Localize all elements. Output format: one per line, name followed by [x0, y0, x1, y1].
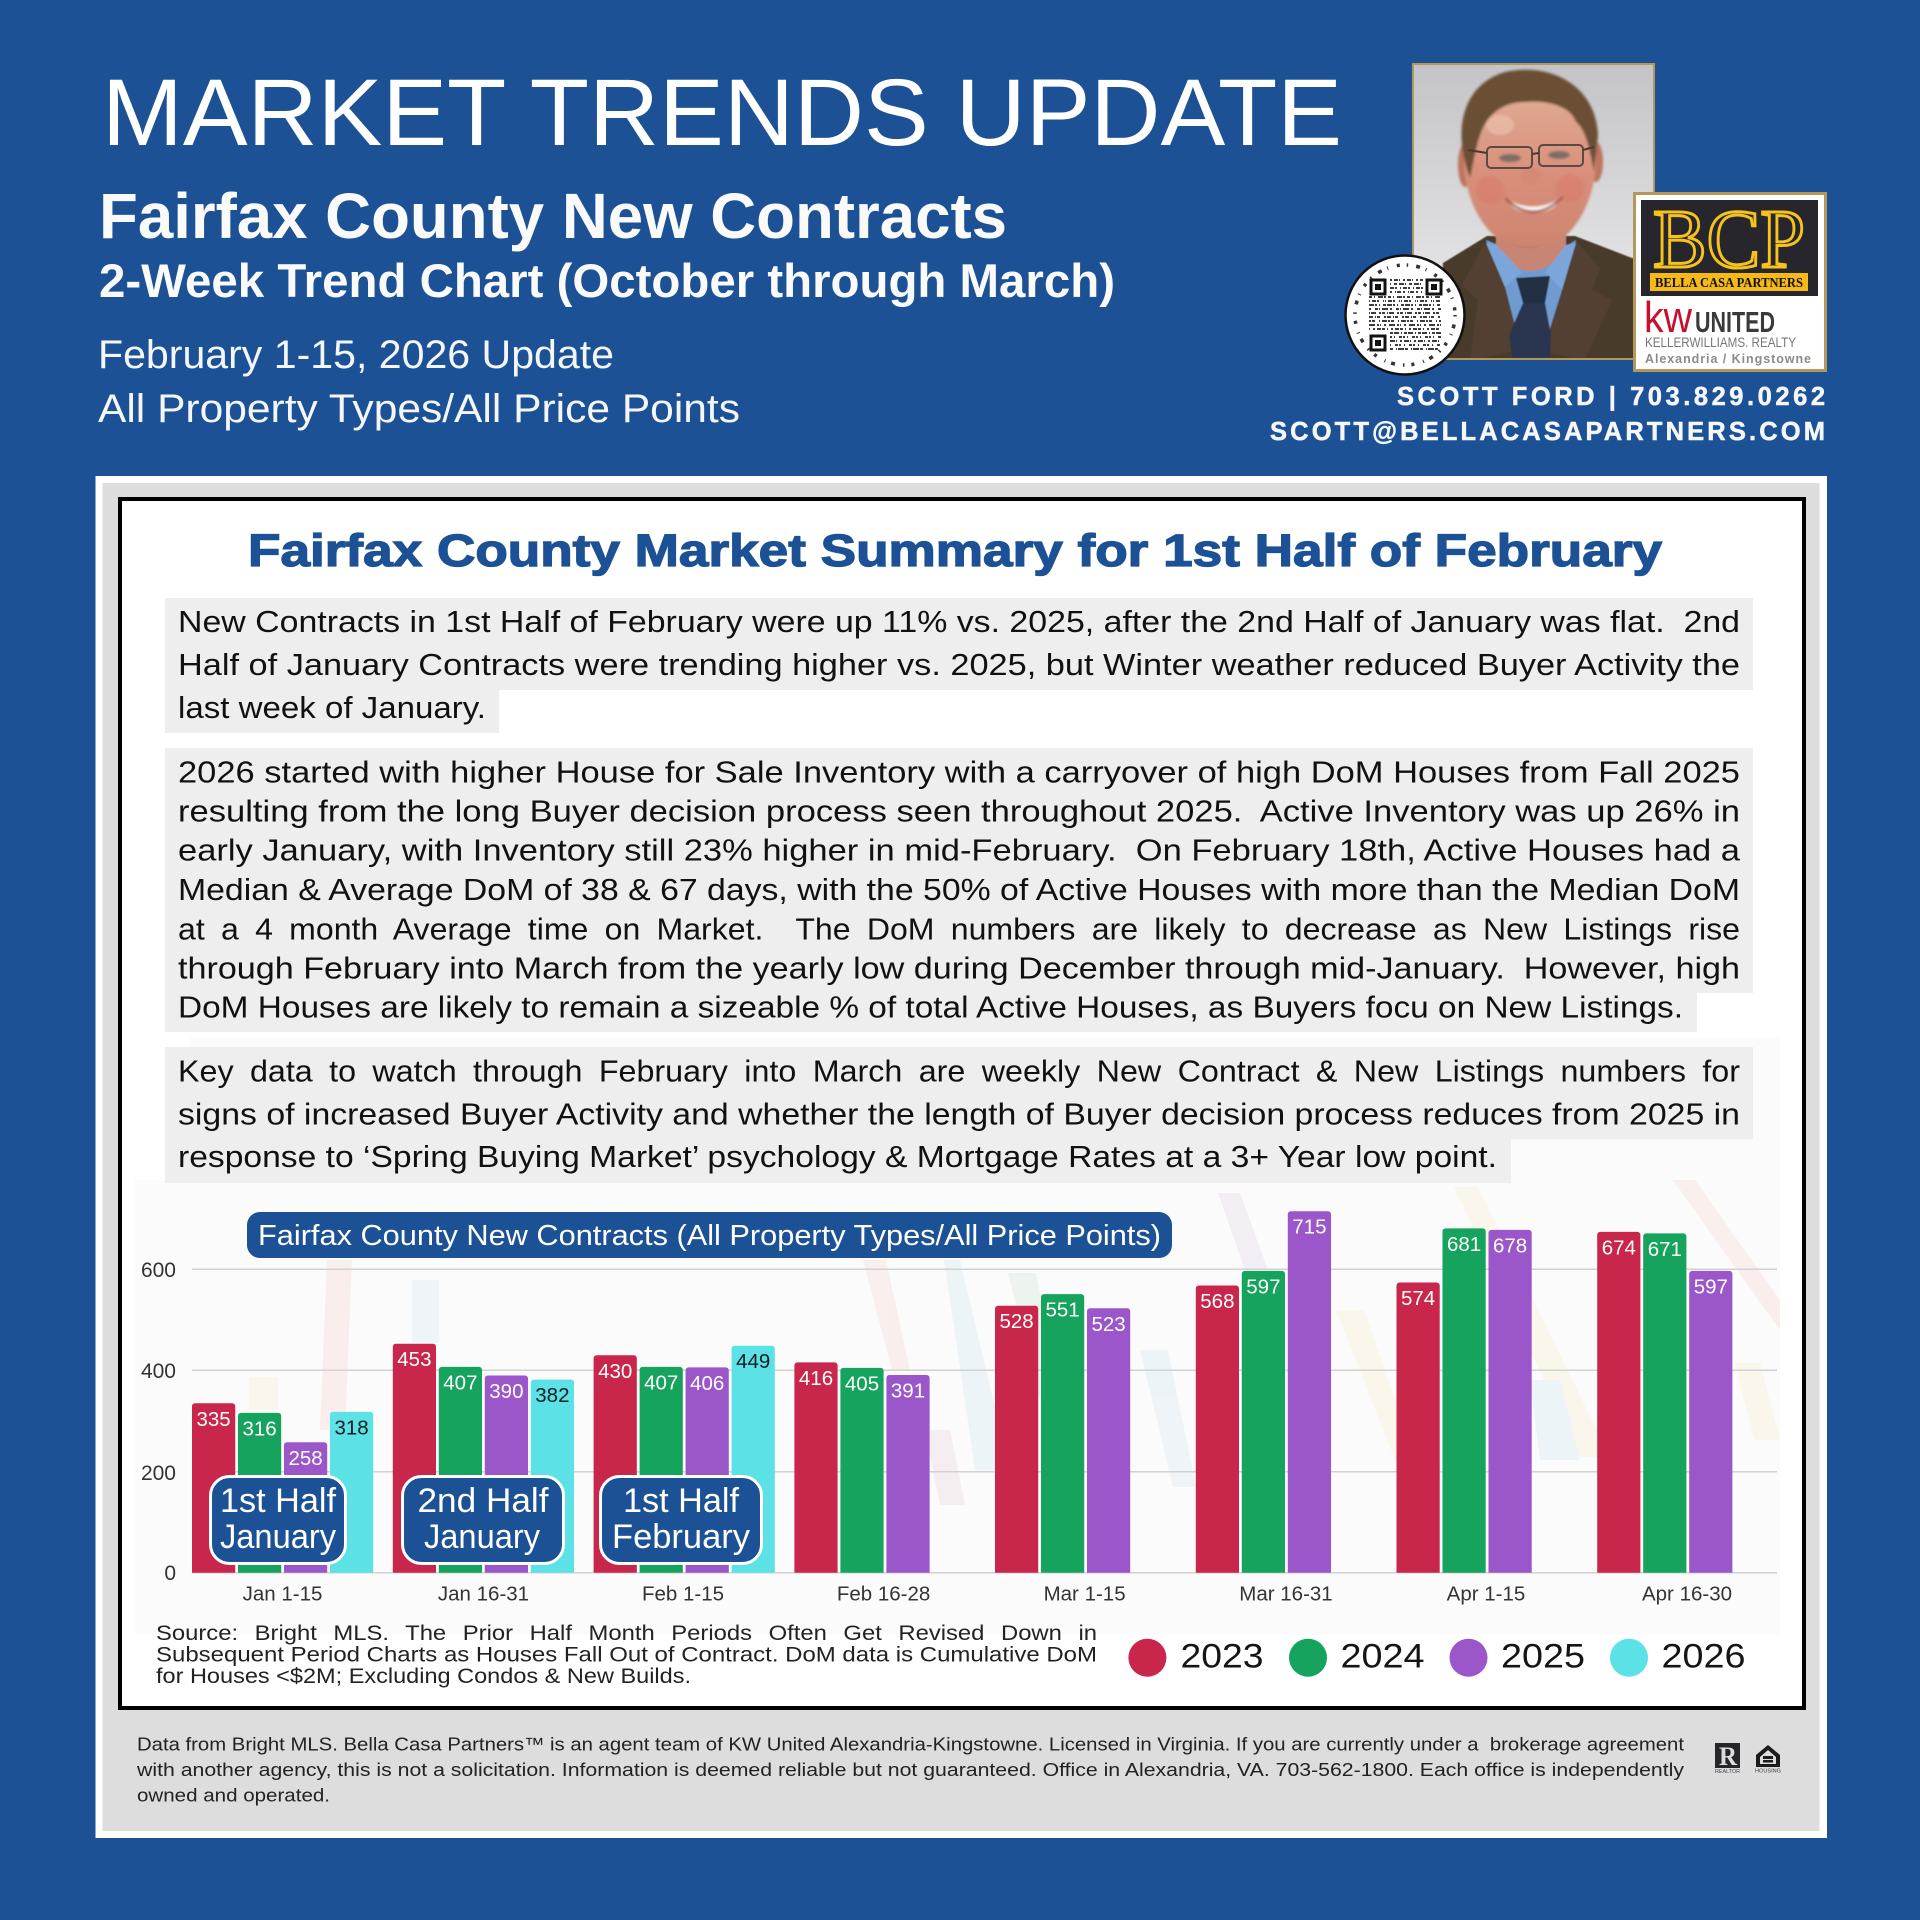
source note: Subsequent Period Charts as Houses Fall Out of Contract. DoM data is Cumulative DoM [156, 1643, 1097, 1667]
header [98, 60, 1342, 431]
callout: 1st Half January [210, 1476, 346, 1564]
text block: paragraph 2: Median & Average DoM of 38 & 67 days, with the 50% of Active Houses with more than the Median DoM [178, 873, 1740, 907]
bar group: Jan 16-31: 407 [443, 1371, 478, 1394]
icon: equal housing [1755, 1745, 1781, 1774]
subtitle: chart description: 2-Week Trend Chart (October through March) [99, 254, 1115, 307]
bar group: Mar 1-15: 528 [999, 1310, 1034, 1333]
footer disclaimer: owned and operated. [137, 1785, 330, 1806]
bar group: Mar 16-31 [1196, 1211, 1331, 1579]
callout: 1st Half January: January [220, 1518, 336, 1556]
callout: 1st Half February: 1st Half [623, 1482, 740, 1520]
text block: paragraph 2: at a 4 month Average time on Market. The DoM numbers are likely to decrease as New Listings rise [178, 912, 1740, 946]
Bella Casa Partners logo: BCP [1653, 193, 1805, 286]
bar group: Feb 1-15: 449 [736, 1350, 770, 1373]
portrait photo [1413, 64, 1660, 360]
footer disclaimer: with another agency, this is not a solicitation. Information is deemed reliable but not guaranteed. Office in Alexandria, VA. 703-562-1800. Each office is independently [136, 1759, 1685, 1780]
legend item: 2025: 2025 [1501, 1638, 1585, 1676]
x axis labels: Apr 1-15 [1447, 1583, 1525, 1606]
footer disclaimer [136, 1734, 1685, 1806]
bar group: Apr 16-30: 671 [1648, 1238, 1682, 1261]
bar group: Jan 16-31: 453 [397, 1348, 432, 1371]
bar group: Jan 1-15: 335 [196, 1408, 231, 1431]
bar group: Apr 1-15: 678 [1493, 1234, 1527, 1257]
legend [1128, 1638, 1746, 1677]
chart title pill: Fairfax County New Contracts (All Property Types/All Price Points) [258, 1220, 1161, 1252]
footer disclaimer: Data from Bright MLS. Bella Casa Partners™ is an agent team of KW United Alexandria-Kingstowne. Licensed in Virginia. If you are currently under a brokerage agreement [137, 1734, 1684, 1755]
text block: paragraph 2: 2026 started with higher House for Sale Inventory with a carryover of high DoM Houses from Fall 2025 [178, 755, 1740, 789]
bar group: Jan 1-15: 316 [242, 1417, 277, 1440]
bar group: Apr 1-15: 681 [1447, 1233, 1481, 1256]
bar group: Jan 16-31 [393, 1344, 574, 1579]
bar group: Jan 1-15: 258 [288, 1447, 323, 1470]
legend item: 2026 [1610, 1638, 1746, 1677]
x axis labels: Mar 16-31 [1239, 1583, 1333, 1606]
bar group: Mar 1-15 [995, 1294, 1130, 1579]
bar group: Feb 16-28: 405 [845, 1372, 879, 1395]
callout: 2nd Half January [402, 1476, 564, 1564]
bar chart [141, 1211, 1777, 1606]
title: MARKET TRENDS UPDATE [102, 60, 1342, 166]
KW United logo: kw [1644, 293, 1692, 342]
agent name and phone: SCOTT FORD | 703.829.0262 [1397, 383, 1825, 411]
legend item: 2023 [1128, 1638, 1264, 1677]
text block: paragraph 3: signs of increased Buyer Activity and whether the length of Buyer decision process reduces from 2025 in [178, 1097, 1740, 1131]
scope line: All Property Types/All Price Points [98, 387, 740, 431]
bar group: Feb 16-28: 416 [799, 1367, 833, 1390]
panel: market summary [120, 499, 1804, 1708]
bar group: Mar 16-31: 568 [1200, 1290, 1235, 1313]
bar group: Mar 1-15: 523 [1091, 1313, 1126, 1336]
text block: paragraph 2: early January, with Inventory still 23% higher in mid-February. On February 18th, Active Houses had a [178, 834, 1740, 868]
KW United logo: Alexandria / Kingstowne [1645, 352, 1811, 366]
bar group: Apr 1-15: 574 [1401, 1287, 1435, 1310]
callout: 1st Half January: 1st Half [220, 1482, 337, 1520]
icon: realtor: R [1719, 1742, 1737, 1771]
contact details [1270, 383, 1825, 446]
faint background chart image [135, 1037, 1780, 1635]
text block: paragraph 1 [165, 598, 1753, 733]
legend item: 2024 [1289, 1638, 1424, 1677]
text block: paragraph 3: response to ‘Spring Buying Market’ psychology & Mortgage Rates at a 3+ Year low point. [178, 1140, 1497, 1174]
icon: realtor [1715, 1742, 1740, 1775]
text block: paragraph 2: resulting from the long Buyer decision process seen throughout 2025. Active Inventory was up 26% in [178, 795, 1740, 829]
text block: paragraph 3 [165, 1047, 1753, 1183]
y axis labels: 600 [141, 1259, 176, 1282]
legend item: 2023: 2023 [1180, 1638, 1264, 1676]
text block: paragraph 1: New Contracts in 1st Half of February were up 11% vs. 2025, after the 2nd Half of January was flat. 2nd [178, 605, 1740, 639]
callout: 1st Half February [600, 1476, 762, 1564]
bar group: Mar 1-15: 551 [1045, 1299, 1080, 1322]
source note: for Houses <$2M; Excluding Condos & New Builds. [156, 1664, 691, 1688]
bar group: Feb 1-15: 430 [598, 1360, 632, 1383]
text block: paragraph 2: DoM Houses are likely to remain a sizeable % of total Active Houses, as Buyers focu on New Listings. [178, 991, 1683, 1025]
source note: Source: Bright MLS. The Prior Half Month Periods Often Get Revised Down in [156, 1621, 1097, 1645]
x axis labels: Feb 1-15 [642, 1583, 724, 1606]
y axis labels: 0 [164, 1562, 176, 1585]
KW United logo: KELLERWILLIAMS. REALTY [1645, 334, 1797, 350]
legend item: 2026: 2026 [1662, 1638, 1746, 1676]
bar group: Mar 16-31: 597 [1246, 1275, 1281, 1298]
x axis labels: Apr 16-30 [1642, 1583, 1732, 1606]
bar group: Apr 1-15 [1396, 1228, 1532, 1579]
update date: February 1-15, 2026 Update [98, 333, 614, 377]
brand logo card [1634, 193, 1826, 370]
text block: paragraph 3: Key data to watch through February into March are weekly New Contract & New Listings numbers for [178, 1055, 1740, 1089]
bar group: Jan 1-15: 318 [334, 1416, 369, 1439]
bar group: Apr 16-30 [1597, 1232, 1732, 1579]
source note [156, 1621, 1097, 1688]
y axis labels: 200 [141, 1462, 176, 1485]
bar group: Jan 16-31: 390 [489, 1380, 524, 1403]
KW United logo: UNITED [1695, 307, 1775, 339]
x axis labels [243, 1583, 1732, 1606]
callout: 2nd Half January: 2nd Half [418, 1482, 549, 1520]
text block: paragraph 2 [165, 748, 1753, 1032]
KW United logo [1644, 293, 1811, 366]
heading: Fairfax County Market Summary for 1st Half of February [248, 525, 1662, 576]
x axis labels: Mar 1-15 [1044, 1583, 1126, 1606]
Bella Casa Partners logo: BELLA CASA PARTNERS [1655, 276, 1803, 291]
bars [192, 1211, 1732, 1579]
icon: equal housing: HOUSING [1755, 1768, 1781, 1774]
bar group: Feb 1-15 [594, 1346, 775, 1579]
bar group: Jan 1-15 [192, 1403, 373, 1578]
x axis labels: Jan 1-15 [243, 1583, 322, 1606]
x axis labels: Jan 16-31 [438, 1583, 529, 1606]
text block: paragraph 2: through February into March from the yearly low during December through mid-January. However, high [178, 951, 1740, 985]
agent email: SCOTT@BELLACASAPARTNERS.COM [1270, 418, 1825, 446]
bar group: Feb 1-15: 407 [644, 1371, 678, 1394]
bar group: Apr 16-30: 597 [1694, 1275, 1728, 1298]
bar group: Apr 16-30: 674 [1602, 1236, 1636, 1259]
legend item: 2024: 2024 [1340, 1638, 1424, 1676]
callout: 2nd Half January: January [424, 1518, 540, 1556]
callout: 1st Half February: February [612, 1518, 750, 1556]
bar group: Feb 16-28 [794, 1362, 930, 1579]
x axis labels: Feb 16-28 [837, 1583, 930, 1606]
icon: realtor: REALTOR [1715, 1769, 1740, 1775]
panel: outer white frame and gray mat [96, 476, 1827, 1838]
y axis labels: 400 [141, 1360, 176, 1383]
subtitle: county: Fairfax County New Contracts [99, 180, 1007, 252]
bar group: Feb 1-15: 406 [690, 1372, 724, 1395]
text block: paragraph 1: Half of January Contracts were trending higher vs. 2025, but Winter weather reduced Buyer Activity the [178, 648, 1740, 682]
y axis labels [141, 1259, 176, 1585]
bar group: Feb 16-28: 391 [891, 1380, 925, 1402]
bar group: Jan 16-31: 382 [535, 1384, 570, 1407]
bar group: Mar 16-31: 715 [1292, 1216, 1327, 1239]
legend item: 2025 [1450, 1638, 1585, 1677]
text block: paragraph 1: last week of January. [178, 691, 486, 725]
chart title pill [247, 1212, 1172, 1258]
icon: QR code [1346, 256, 1464, 374]
